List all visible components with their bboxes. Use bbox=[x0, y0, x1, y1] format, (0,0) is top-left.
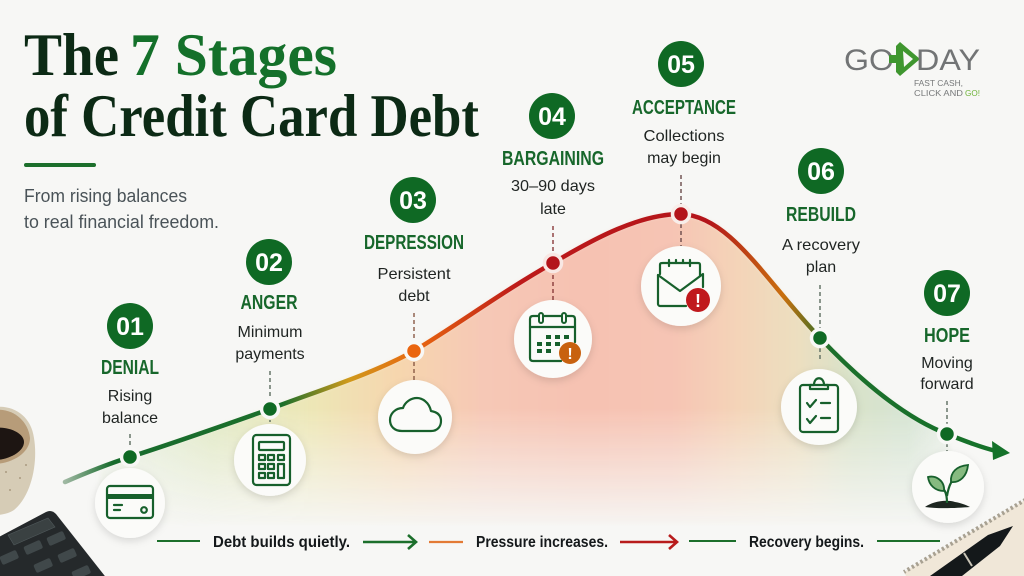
heading hope: HOPE bbox=[924, 324, 970, 347]
subtitle: to real financial freedom. bbox=[24, 212, 219, 232]
logo: GoDay: CLICK AND bbox=[914, 89, 963, 98]
badge 06: 06 bbox=[807, 158, 835, 186]
title underline bbox=[24, 163, 96, 167]
description 05 bbox=[644, 128, 724, 167]
arrow green bbox=[363, 535, 416, 549]
stage 07: hope bbox=[912, 270, 984, 523]
description 02: Minimum bbox=[238, 324, 302, 341]
main curve bbox=[65, 214, 996, 482]
title: The bbox=[24, 22, 119, 88]
stage 06: rebuild bbox=[781, 148, 860, 445]
badge 05 bbox=[658, 41, 704, 87]
description 06: A recovery bbox=[782, 237, 860, 254]
notebook and pen bbox=[904, 497, 1024, 576]
marker 06 bbox=[812, 330, 828, 346]
bottom caption: pressure increases bbox=[429, 534, 677, 551]
icon: sprout bbox=[912, 451, 984, 523]
badge 05: 05 bbox=[667, 51, 695, 79]
description 02: payments bbox=[235, 346, 305, 363]
badge 07 bbox=[924, 270, 970, 316]
title: 7 Stages bbox=[130, 22, 337, 88]
bottom caption: pressure increases: Pressure increases. bbox=[476, 534, 608, 551]
icon: clipboard bbox=[781, 369, 857, 445]
description 06: plan bbox=[806, 259, 836, 276]
bottom caption: debt builds quietly: Debt builds quietly. bbox=[213, 534, 350, 551]
description 05: may begin bbox=[647, 150, 721, 167]
badge 03 bbox=[390, 177, 436, 223]
badge 07: 07 bbox=[933, 280, 961, 308]
connector 04 bbox=[552, 226, 554, 300]
stage 05: acceptance bbox=[632, 41, 736, 326]
description 04: late bbox=[540, 201, 566, 218]
description 04 bbox=[511, 178, 595, 218]
icon: calendar with alert bbox=[514, 300, 592, 378]
connector 06 bbox=[819, 285, 821, 360]
heading bargaining: BARGAINING bbox=[502, 147, 604, 170]
heading denial: DENIAL bbox=[101, 356, 159, 379]
marker 01 bbox=[122, 448, 138, 466]
logo: GoDay: GO! bbox=[965, 89, 980, 98]
badge 06 bbox=[798, 148, 844, 194]
connector 05 bbox=[680, 175, 682, 247]
marker 07 bbox=[938, 426, 956, 442]
bottom caption: debt builds quietly bbox=[157, 534, 416, 551]
subtitle: From rising balances bbox=[24, 186, 187, 206]
stage 01: denial bbox=[95, 303, 165, 538]
stage 04: bargaining bbox=[502, 93, 604, 378]
description 07: Moving bbox=[921, 355, 973, 372]
description 03: Persistent bbox=[378, 266, 451, 283]
badge 01: 01 bbox=[116, 313, 144, 341]
description 02 bbox=[235, 324, 305, 363]
connector 01 bbox=[129, 434, 131, 448]
marker 02 bbox=[262, 400, 278, 418]
description 07 bbox=[920, 355, 974, 393]
subtitle bbox=[24, 186, 219, 232]
heading depression: DEPRESSION bbox=[364, 231, 464, 254]
badge 01 bbox=[107, 303, 153, 349]
description 07: forward bbox=[920, 376, 974, 393]
icon: envelope with alert bbox=[641, 246, 721, 326]
stage 03: depression bbox=[364, 177, 464, 454]
heading anger: ANGER bbox=[240, 291, 298, 314]
arrow red bbox=[620, 535, 677, 549]
heading acceptance: ACCEPTANCE bbox=[632, 96, 736, 119]
logo: GoDay: DAY bbox=[916, 44, 980, 77]
badge 04: 04 bbox=[538, 103, 566, 131]
badge 02: 02 bbox=[255, 249, 283, 277]
description 01: balance bbox=[102, 410, 158, 427]
logo: GoDay: FAST CASH, bbox=[914, 79, 963, 88]
connector 07 bbox=[946, 401, 948, 452]
area under curve bbox=[100, 214, 965, 525]
description 04: 30–90 days bbox=[511, 178, 595, 195]
bottom caption: recovery begins: Recovery begins. bbox=[749, 534, 864, 551]
title bbox=[24, 22, 479, 149]
marker 03 bbox=[406, 342, 422, 360]
logo: GoDay bbox=[844, 42, 980, 98]
calculator bbox=[0, 511, 108, 576]
badge 03: 03 bbox=[399, 187, 427, 215]
curve arrowhead bbox=[992, 441, 1010, 460]
icon: calendar with alert: ! bbox=[567, 346, 573, 363]
connector 03 bbox=[413, 313, 415, 380]
badge 02 bbox=[246, 239, 292, 285]
description 03 bbox=[378, 266, 451, 305]
marker 04 bbox=[544, 254, 562, 272]
logo: GoDay: GO bbox=[844, 44, 894, 77]
icon: calculator bbox=[234, 424, 306, 496]
icon: envelope with alert: ! bbox=[695, 291, 701, 311]
title: of Credit Card Debt bbox=[24, 83, 479, 149]
description 01: Rising bbox=[108, 388, 152, 405]
stage 02: anger bbox=[234, 239, 306, 496]
coffee mug bbox=[0, 407, 35, 515]
marker 05 bbox=[672, 206, 690, 222]
connector 02 bbox=[269, 371, 271, 422]
heading rebuild: REBUILD bbox=[786, 203, 856, 226]
description 05: Collections bbox=[644, 128, 724, 145]
icon: cloud bbox=[378, 380, 452, 454]
description 06 bbox=[782, 237, 860, 276]
description 03: debt bbox=[398, 288, 430, 305]
icon: credit card bbox=[95, 468, 165, 538]
description 01 bbox=[102, 388, 158, 427]
badge 04 bbox=[529, 93, 575, 139]
